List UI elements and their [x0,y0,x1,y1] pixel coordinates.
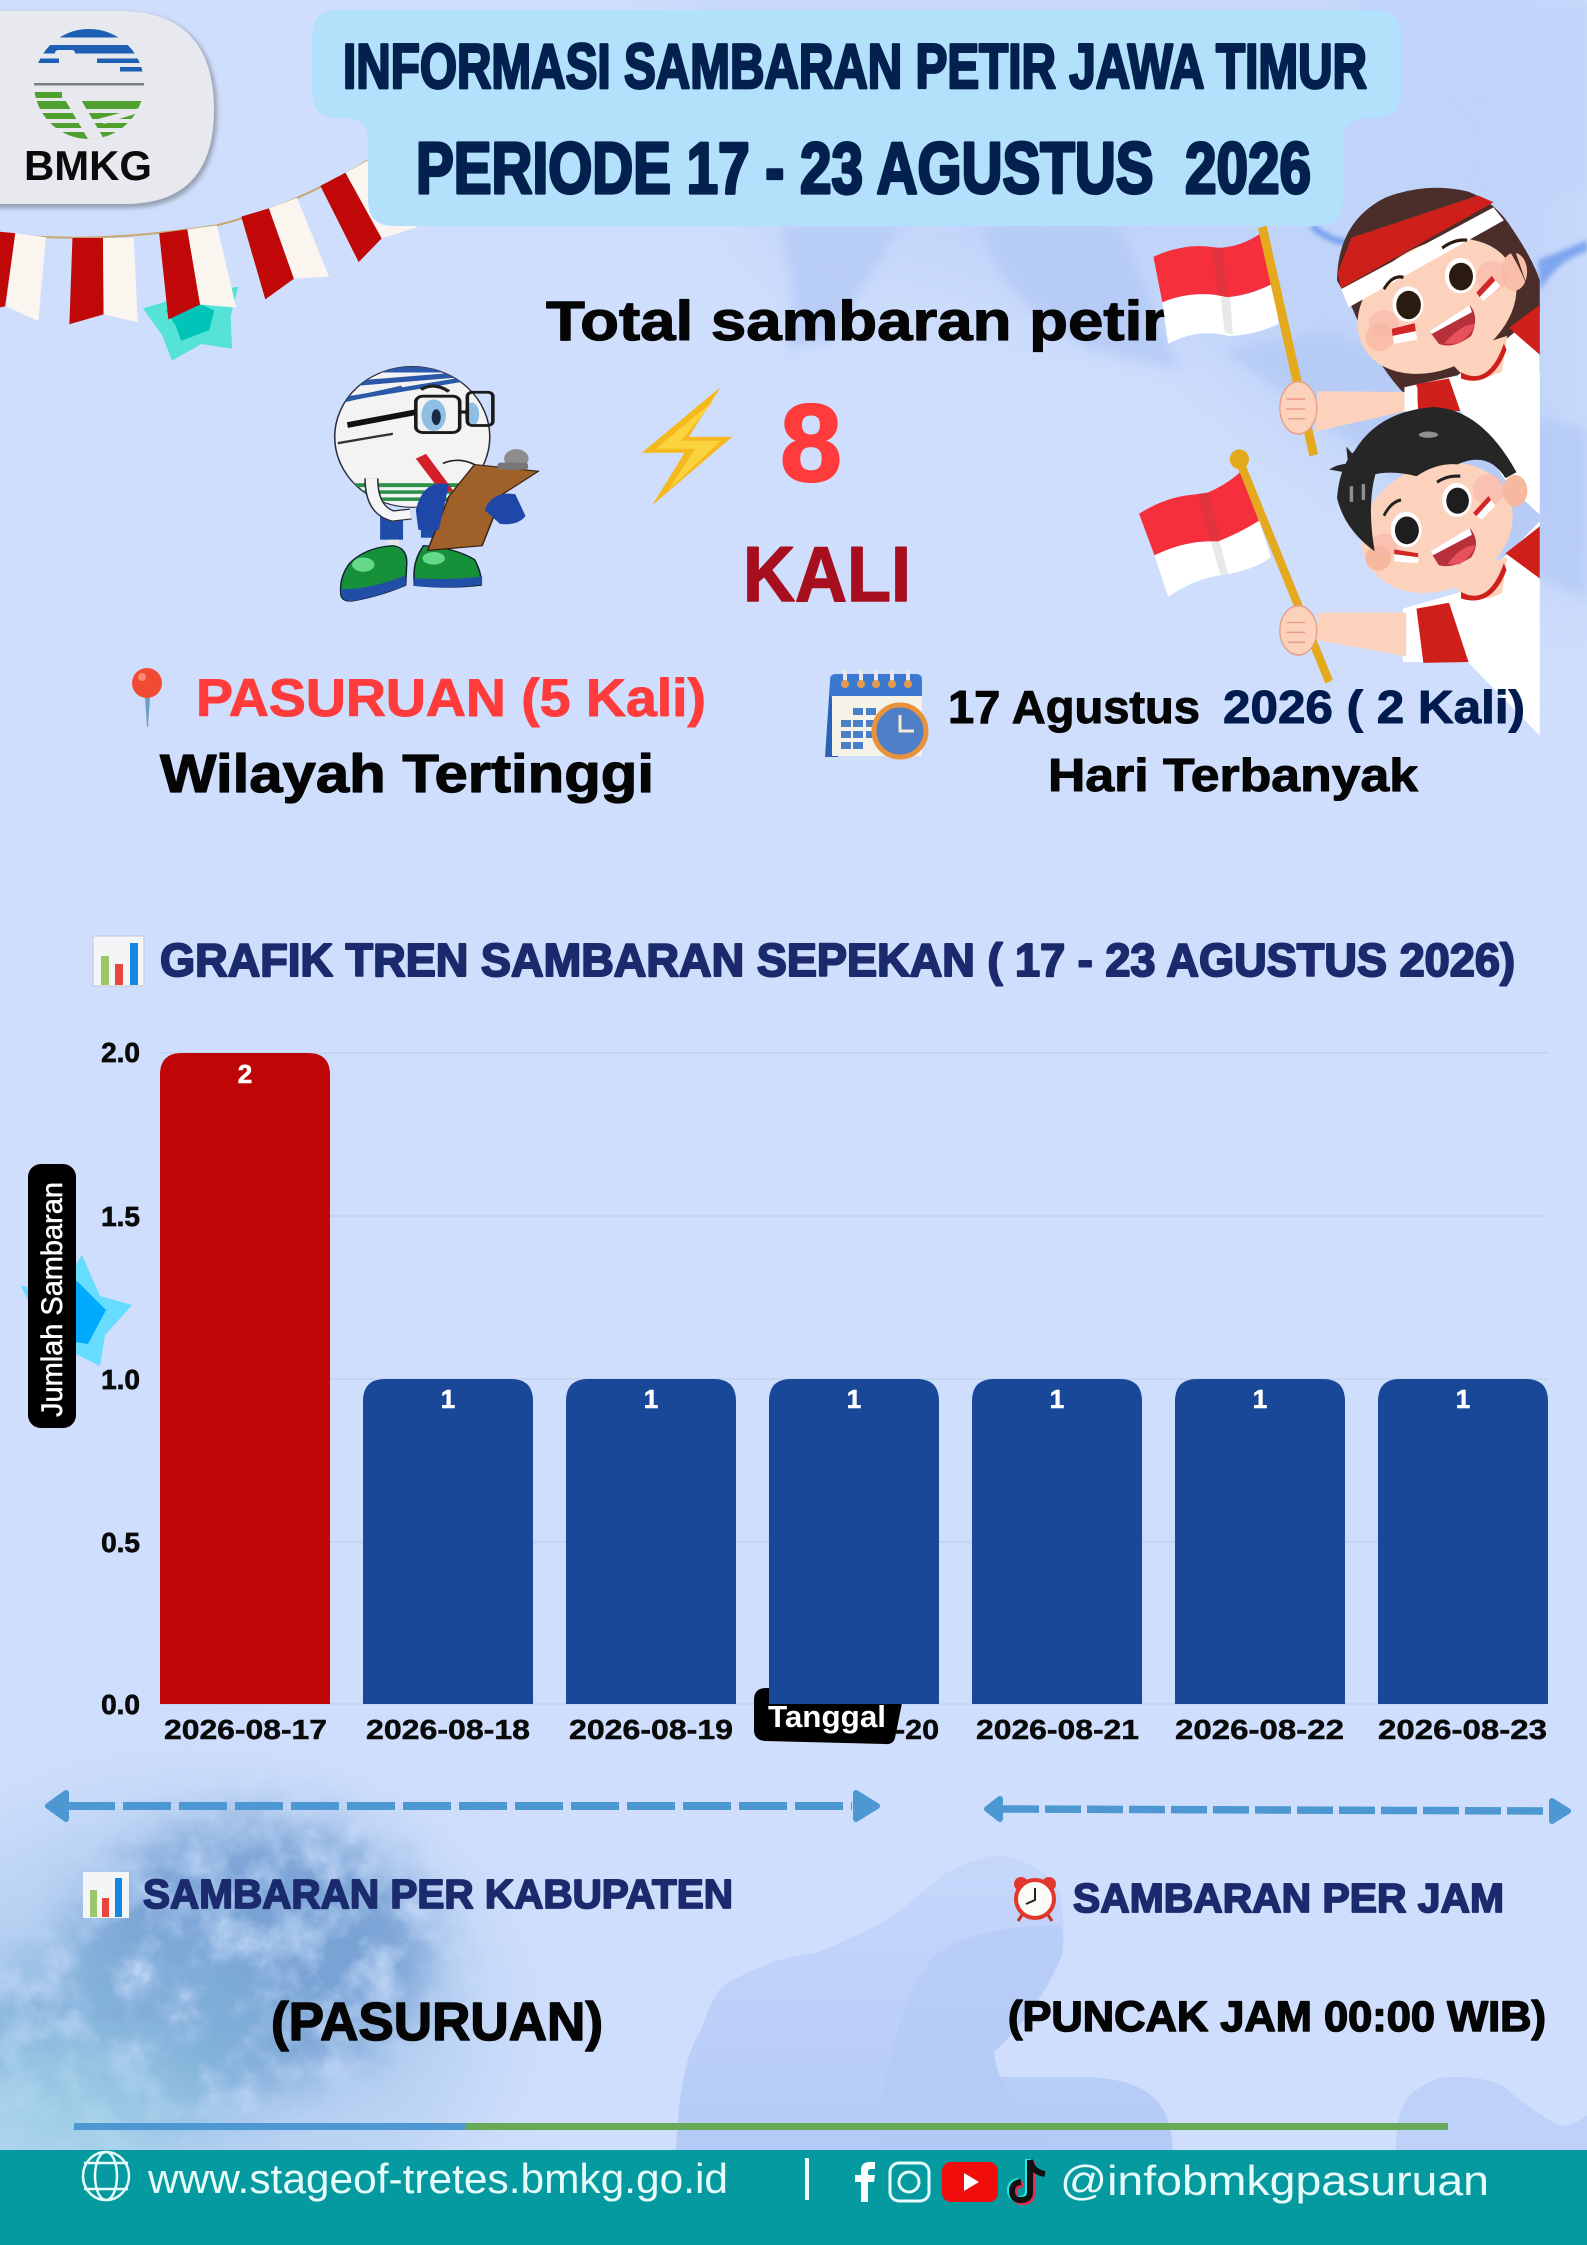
day label: Hari Terbanyak [1048,749,1418,801]
x axis title pill: Tanggal [768,1699,886,1734]
bar value labels: 1 [1050,1384,1064,1414]
icon: tiktok [1010,2159,1045,2202]
icon: bar chart [93,936,144,986]
bar 20 Aug [769,1379,939,1704]
children with flags [1139,188,1543,739]
bar 18 Aug [363,1379,533,1704]
hour heading: SAMBARAN PER JAM [1073,1875,1504,1921]
total unit: KALI [743,530,911,618]
day value: 17 Agustus [948,681,1200,733]
icon: calendar with clock [825,670,926,757]
bar 21 Aug [972,1379,1142,1704]
footer rule [74,2123,1448,2130]
icon: youtube [942,2162,998,2202]
icon: bar chart small [83,1872,129,1918]
bar 22 Aug [1175,1379,1345,1704]
y axis ticks [101,1037,140,1720]
y axis title [28,1164,76,1428]
x axis labels: 2026-08-18 [366,1714,530,1745]
girl [1337,188,1543,518]
bar value labels: 1 [847,1384,861,1414]
flag 1 [1153,227,1314,455]
bar value labels [238,1059,1470,1414]
footer bar [0,2150,1587,2245]
mascot legs [380,510,441,550]
mascot body [327,367,495,516]
total value: 8 [780,382,842,505]
mascot clipboard [428,449,538,550]
region label: Wilayah Tertinggi [160,744,654,804]
bar value labels: 2 [238,1059,252,1089]
stat: busiest day [825,670,1525,801]
star behind y axis [21,1255,132,1366]
mascot glasses and eyes [416,386,493,465]
boy body [1317,518,1543,739]
x axis title pill [754,1688,905,1744]
stat: highest region [132,668,706,804]
title panel [312,10,1401,226]
y axis ticks: 1.5 [101,1201,140,1232]
district value: (PASURUAN) [271,1992,603,2052]
x axis labels: 2026-08-17 [164,1714,327,1745]
chart heading [93,934,1515,986]
arrow: left section [48,1793,877,1819]
website: www.stageof-tretes.bmkg.go.id [147,2155,728,2202]
icon: alarm clock [1014,1877,1056,1921]
decorative star near bunting [143,287,238,361]
mascot pen and gloves [416,454,526,530]
bar chart: weekly trend [21,1037,1548,1745]
y axis ticks: 2.0 [101,1037,140,1068]
bar 17 Aug [160,1053,330,1704]
bar value labels: 1 [1456,1384,1470,1414]
mascot [327,367,538,601]
watercolor blob lower middle [676,1855,1587,2150]
x axis labels: 2026-08-23 [1378,1714,1547,1745]
watercolor splash lower left [0,1800,490,2240]
x axis labels [164,1714,1547,1745]
bar value labels: 1 [1253,1384,1267,1414]
y axis ticks: 0.5 [101,1527,140,1558]
y axis ticks: 1.0 [101,1364,140,1395]
mascot boots [341,546,482,601]
district heading: SAMBARAN PER KABUPATEN [143,1871,733,1917]
bar 23 Aug [1378,1379,1548,1704]
boy head [1329,407,1527,612]
icon: BMKG emblem [30,29,150,139]
section: per district [83,1871,733,2052]
icon: map pin [132,668,162,727]
bar 19 Aug [566,1379,736,1704]
x axis labels: 2026-08-19 [569,1714,733,1745]
region name: PASURUAN (5 Kali) [196,669,706,728]
x axis labels: -20 [895,1714,939,1745]
total heading: Total sambaran petir [546,289,1167,352]
section: per hour [1008,1875,1546,2041]
flag 2 [1139,449,1329,682]
girl arm and hand [1280,382,1418,434]
icon: facebook [855,2162,875,2202]
x axis labels: 2026-08-21 [976,1714,1139,1745]
bar value labels: 1 [644,1384,658,1414]
bunting flags [0,160,416,324]
logo wordmark: BMKG [24,142,152,189]
chart title: GRAFIK TREN SAMBARAN SEPEKAN ( 17 - 23 AGUSTUS 2026) [160,934,1515,986]
arrow: right section [987,1799,1568,1821]
logo panel: BMKG [0,11,217,208]
x axis labels: 2026-08-22 [1175,1714,1344,1745]
day value year and count: 2026 ( 2 Kali) [1223,681,1525,733]
title line 2: PERIODE 17 - 23 AGUSTUS 2026 [416,129,1311,209]
hour value: (PUNCAK JAM 00:00 WIB) [1008,1993,1546,2041]
icon: globe [83,2152,129,2200]
icon: lightning bolt [642,387,732,505]
y axis ticks: 0.0 [101,1689,140,1720]
bar value labels: 1 [441,1384,455,1414]
y axis title: Jumlah Sambaran [36,1182,69,1417]
social handle: @infobmkgpasuruan [1060,2157,1489,2204]
icon: instagram [890,2163,929,2201]
